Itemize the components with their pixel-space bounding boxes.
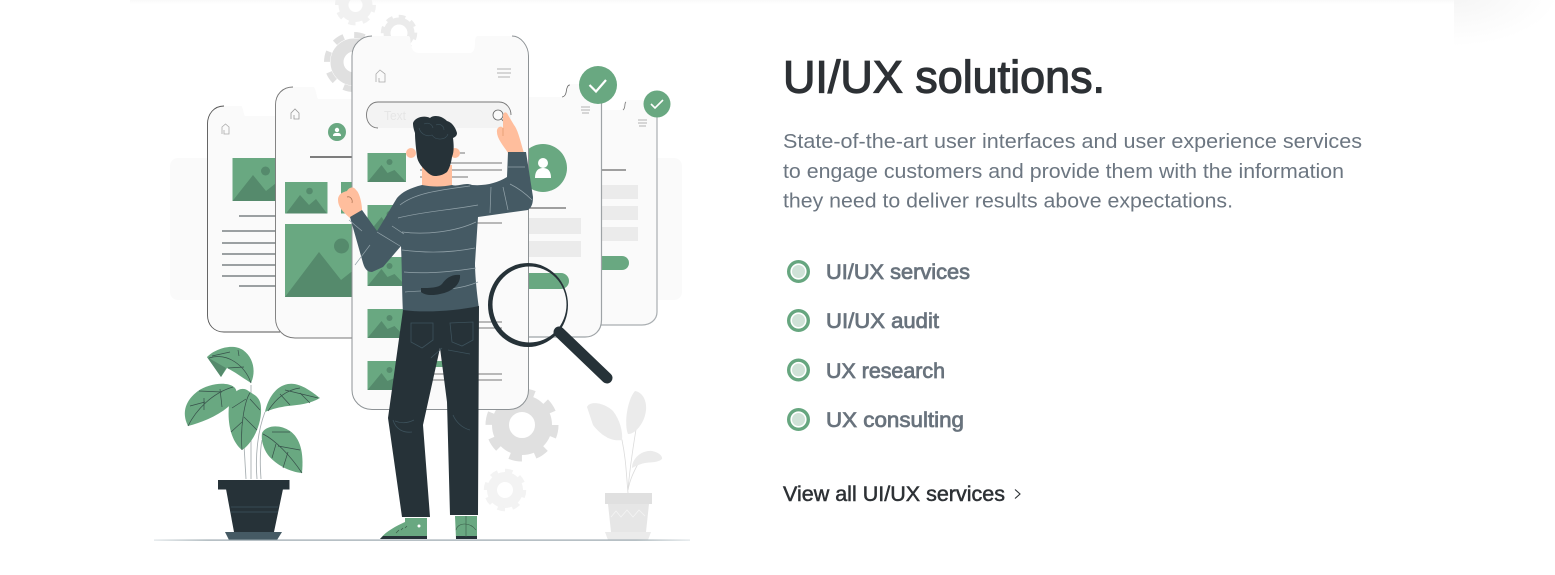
- icon: large check badge: [579, 66, 617, 104]
- hands: [338, 112, 524, 218]
- hair: [413, 116, 457, 176]
- pants: [388, 306, 479, 517]
- list item: UI/UX services: UI/UX services: [826, 261, 970, 284]
- phone screen 1: [208, 106, 300, 332]
- title: UI/UX solutions.: [783, 52, 1105, 102]
- search bar: [366, 102, 511, 128]
- list item: UX consulting: UX consulting: [826, 409, 964, 432]
- corner shadow: [1454, 0, 1555, 48]
- gears: [327, 0, 555, 509]
- list item: UI/UX audit: UI/UX audit: [826, 310, 939, 333]
- search bar: Text: [384, 108, 406, 123]
- link: view all services: View all UI/UX services: [783, 483, 1005, 506]
- fold shadow: [421, 275, 460, 295]
- pot: [218, 480, 290, 540]
- icon: user badge: [519, 144, 567, 192]
- plant: green potted plant: [185, 347, 320, 540]
- phone screen 4: [519, 66, 617, 337]
- service list: [789, 261, 970, 432]
- description text: they need to deliver results above expectations.: [783, 190, 1233, 212]
- description text: to engage customers and provide them with the information: [783, 160, 1344, 183]
- plant: pale potted plant: [587, 391, 662, 540]
- description text: State-of-the-art user interfaces and user experience services: [783, 130, 1362, 153]
- icon: small check badge: [644, 90, 670, 118]
- sweater: [350, 152, 533, 313]
- phone screen 5: [590, 90, 670, 325]
- illustration: person designing phone screens: [154, 0, 690, 541]
- ground line: [154, 540, 690, 541]
- description text: [783, 130, 1362, 212]
- person: [338, 112, 533, 539]
- list item: UX research: UX research: [826, 360, 945, 383]
- shoes: [380, 516, 477, 539]
- back panels: [170, 158, 682, 300]
- phone screen 2: [276, 87, 380, 338]
- phone screen 3: [352, 36, 528, 410]
- image placeholders: [368, 153, 406, 390]
- magnifying glass: [488, 263, 607, 378]
